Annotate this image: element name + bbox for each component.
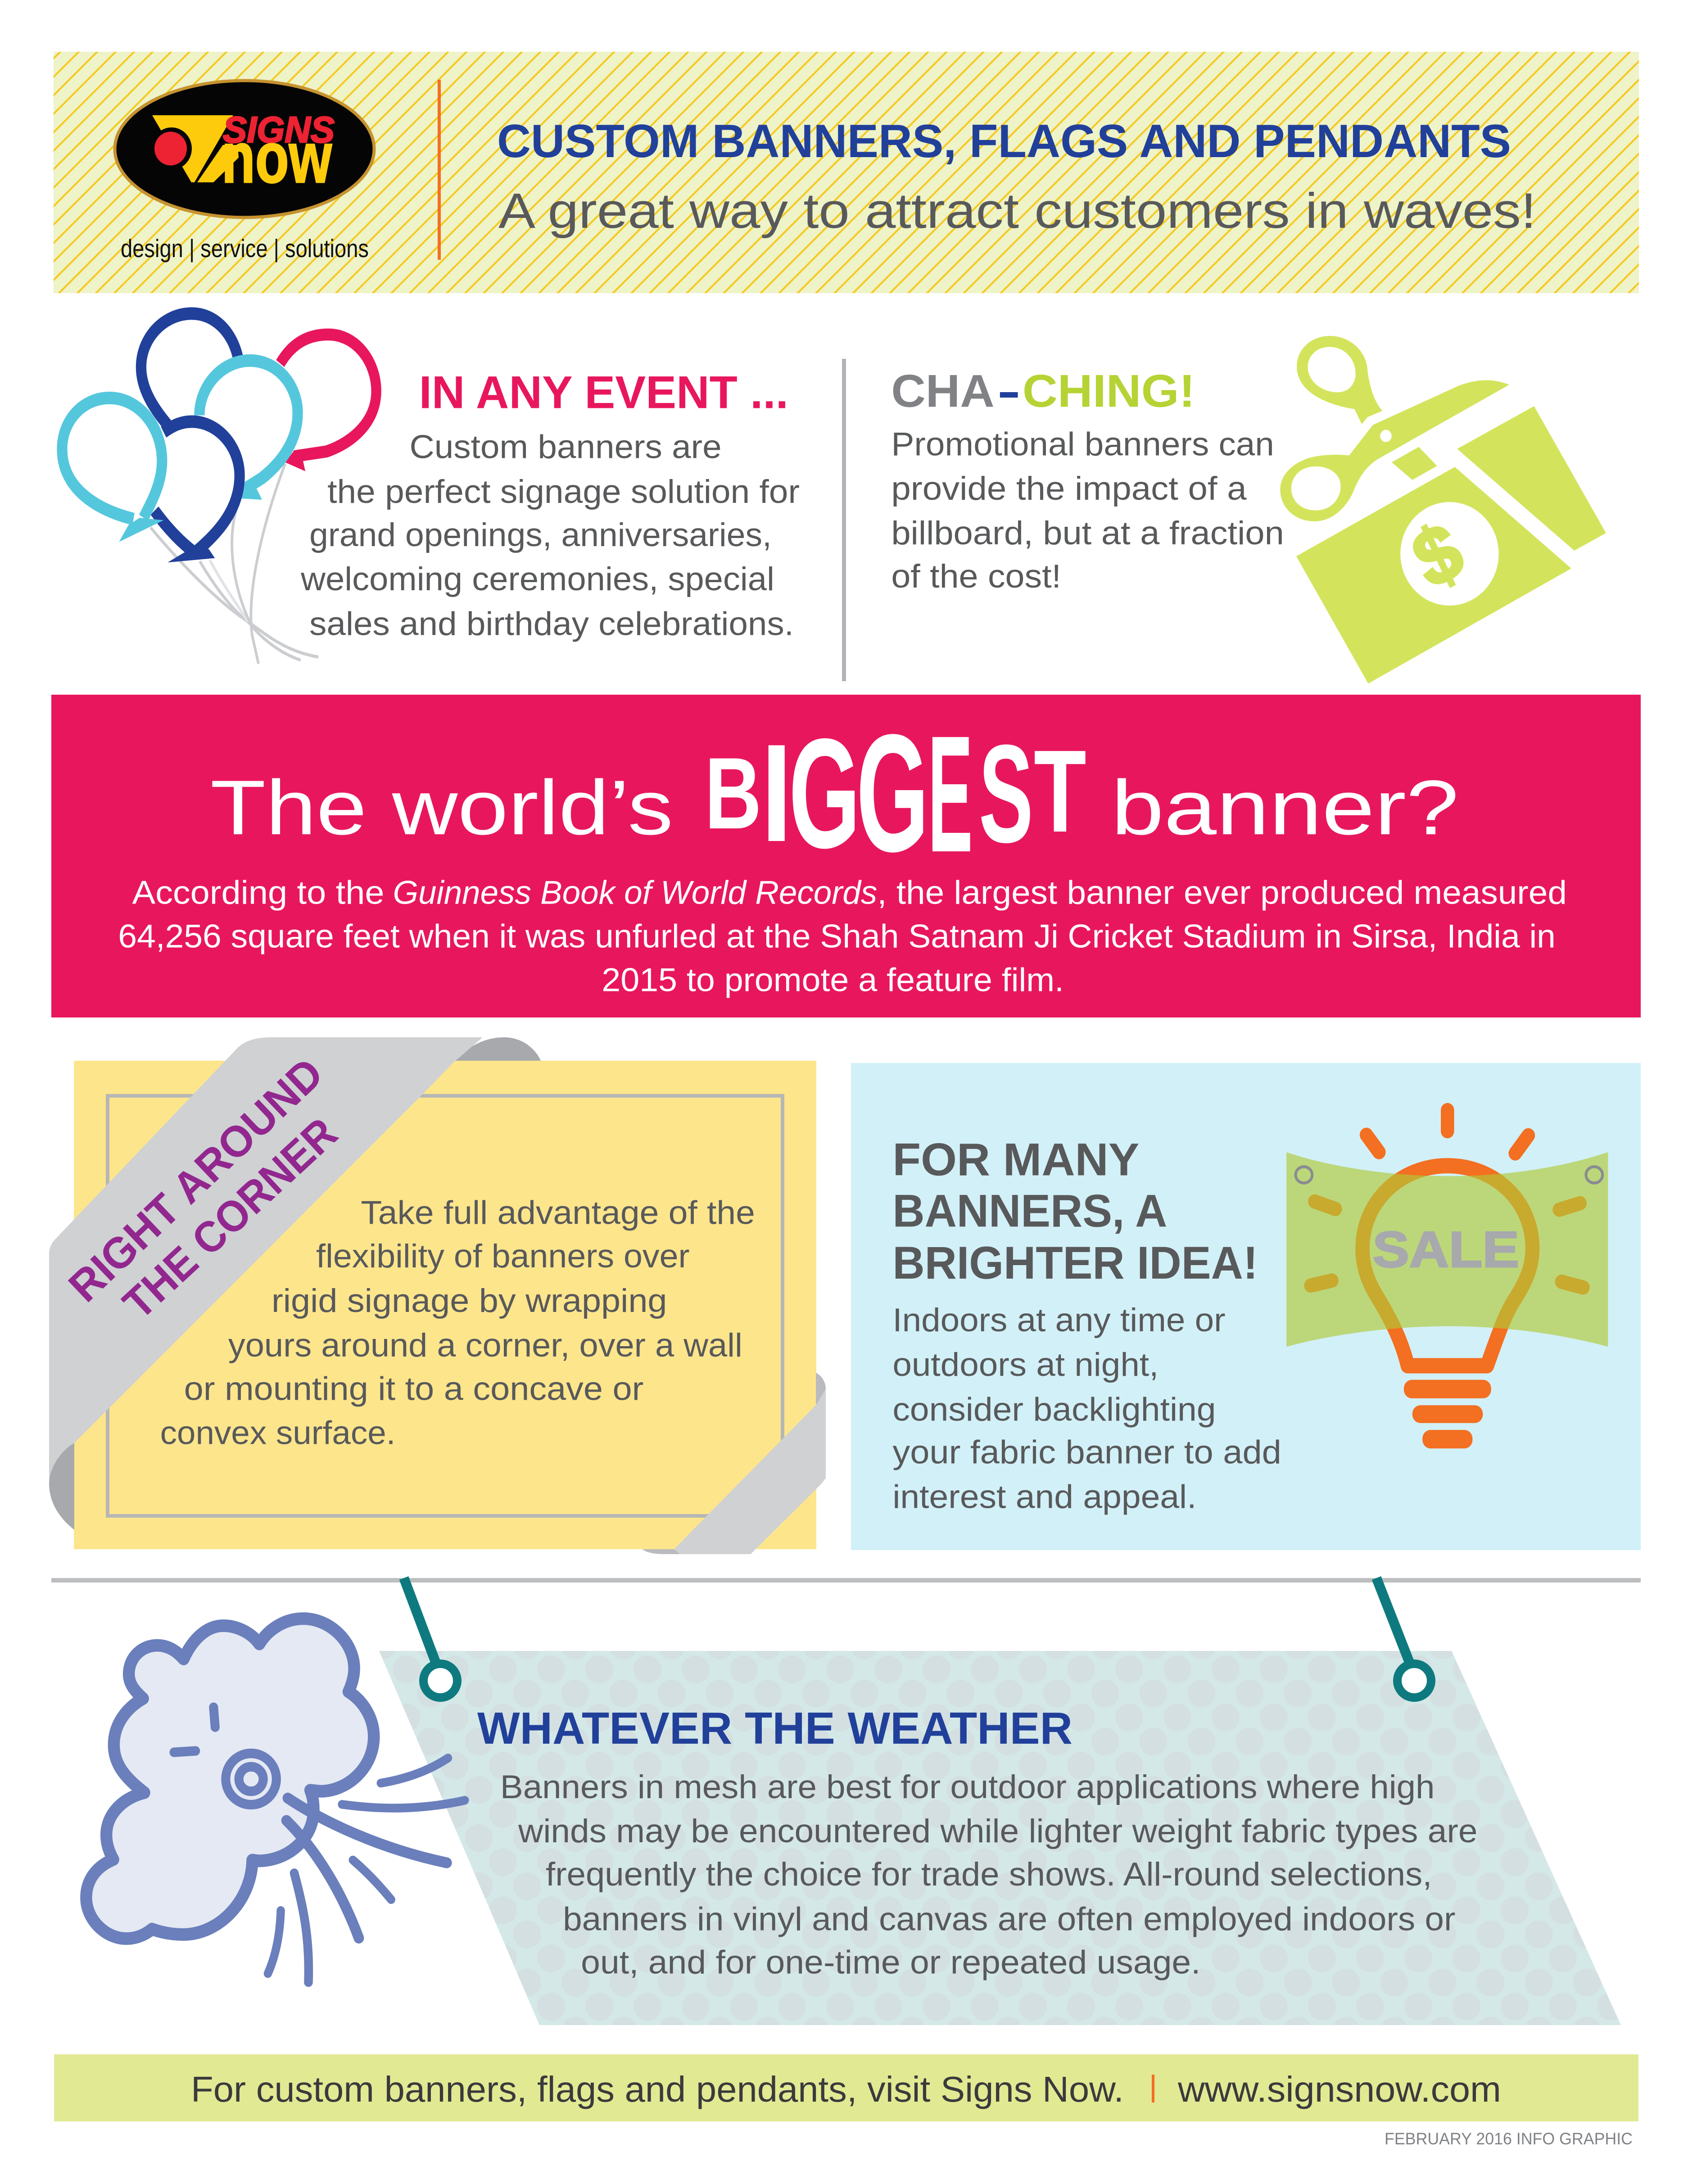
body text <box>300 429 800 642</box>
heading: the world's biggest banner: S <box>979 715 1033 872</box>
logo: Signs Now <box>115 81 374 217</box>
footer url: www.signsnow.com <box>1177 2069 1501 2109</box>
title: CUSTOM BANNERS, FLAGS AND PENDANTS <box>497 115 1511 167</box>
heading: FOR MANY <box>892 1134 1139 1185</box>
icon: balloons <box>62 313 376 664</box>
heading: the world's biggest banner: G <box>789 706 860 881</box>
body text: Promotional banners can <box>891 426 1274 463</box>
body text: banners in vinyl and canvas are often employed indoors or <box>563 1901 1455 1937</box>
body text: your fabric banner to add <box>892 1434 1281 1471</box>
logo: Signs Now: now <box>222 117 332 198</box>
heading: the world's biggest banner: I <box>761 715 792 871</box>
body text: the perfect signage solution for <box>327 474 800 510</box>
panel: a brighter idea <box>851 1063 1641 1550</box>
heading: the world's biggest banner: T <box>1034 726 1086 857</box>
icon: scissors cutting a dollar bill <box>1280 336 1606 683</box>
header divider <box>438 80 441 260</box>
body text <box>500 1769 1478 1981</box>
logo tagline: design | service | solutions <box>121 234 369 262</box>
icon: light bulb over sale banner <box>1286 1110 1608 1448</box>
body text <box>160 1195 755 1451</box>
banner rope right <box>1376 1578 1431 1697</box>
ribbon <box>49 1037 826 1554</box>
heading: the world's biggest banner: B <box>705 736 761 850</box>
ribbon heading: THE CORNER <box>113 1108 346 1328</box>
icon: scissors cutting a dollar bill: $ <box>1400 505 1475 606</box>
panel: right around the corner <box>49 1037 826 1554</box>
body text: convex surface. <box>160 1415 395 1451</box>
body text: consider backlighting <box>892 1391 1216 1428</box>
body text: According to the <box>132 874 384 911</box>
panel: world's biggest banner <box>51 695 1641 1017</box>
panel: header <box>54 52 1639 293</box>
body text: provide the impact of a <box>891 470 1247 507</box>
heading: WHATEVER THE WEATHER <box>477 1703 1073 1754</box>
heading <box>891 366 1195 417</box>
body text: flexibility of banners over <box>316 1238 690 1275</box>
heading: BRIGHTER IDEA! <box>892 1237 1258 1289</box>
column divider <box>842 359 846 681</box>
heading: the world's biggest banner <box>210 699 1459 887</box>
body text: Guinness Book of World Records <box>393 874 877 911</box>
body text: outdoors at night, <box>892 1347 1159 1383</box>
body text: Indoors at any time or <box>892 1302 1226 1338</box>
body text: or mounting it to a concave or <box>184 1370 643 1407</box>
heading: the world's biggest banner: G <box>856 699 929 886</box>
heading: BANNERS, A <box>892 1185 1167 1237</box>
body text: Banners in mesh are best for outdoor applications where high <box>500 1769 1435 1805</box>
body text: grand openings, anniversaries, <box>309 517 772 553</box>
body text: welcoming ceremonies, special <box>300 561 774 597</box>
body text: frequently the choice for trade shows. All-round selections, <box>546 1856 1432 1893</box>
mesh banner <box>379 1651 1621 2025</box>
body text: 64,256 square feet when it was unfurled at the Shah Satnam Ji Cricket Stadium in Sirsa, India in <box>118 918 1556 955</box>
body text: billboard, but at a fraction <box>891 515 1284 552</box>
body text: of the cost! <box>891 558 1061 595</box>
icon: light bulb over sale banner: SALE <box>1372 1222 1519 1278</box>
heading: the world's biggest banner: banner? <box>1111 764 1459 851</box>
subtitle: A great way to attract customers in waves! <box>498 183 1536 239</box>
section: cha-ching <box>891 366 1284 595</box>
body text: , the largest banner ever produced measured <box>877 874 1567 911</box>
horizontal divider <box>51 1578 1641 1583</box>
body text: winds may be encountered while lighter weight fabric types are <box>518 1813 1478 1849</box>
heading: IN ANY EVENT ... <box>419 367 788 418</box>
section: in any event <box>300 367 800 642</box>
body text: Take full advantage of the <box>361 1195 755 1231</box>
date note: FEBRUARY 2016 INFO GRAPHIC <box>1385 2130 1633 2148</box>
body text <box>891 426 1284 595</box>
heading: the world's biggest banner: E <box>928 701 973 887</box>
footer separator <box>1152 2075 1154 2103</box>
body text <box>892 1302 1281 1515</box>
banner rope left <box>404 1578 457 1697</box>
body text: out, and for one-time or repeated usage. <box>581 1944 1201 1981</box>
body text: rigid signage by wrapping <box>272 1283 667 1319</box>
icon: wind cloud <box>86 1619 465 1982</box>
body text: 2015 to promote a feature film. <box>602 962 1064 999</box>
body text: Custom banners are <box>410 429 722 466</box>
body text: interest and appeal. <box>892 1479 1197 1515</box>
heading: the world's biggest banner: The world’s <box>210 764 673 851</box>
logo: Signs Now: SIGNS <box>223 109 335 150</box>
body text <box>118 874 1567 999</box>
footer call to action: For custom banners, flags and pendants, visit Signs Now. <box>191 2069 1124 2109</box>
panel: whatever the weather <box>379 1578 1621 2025</box>
body text: sales and birthday celebrations. <box>309 606 794 642</box>
heading: CHA <box>891 366 995 417</box>
ribbon heading: RIGHT AROUND <box>59 1049 332 1311</box>
heading: - <box>997 366 1021 417</box>
footer bar <box>54 2054 1638 2121</box>
heading <box>892 1134 1258 1289</box>
heading: CHING! <box>1023 366 1195 417</box>
body text: yours around a corner, over a wall <box>228 1327 742 1364</box>
